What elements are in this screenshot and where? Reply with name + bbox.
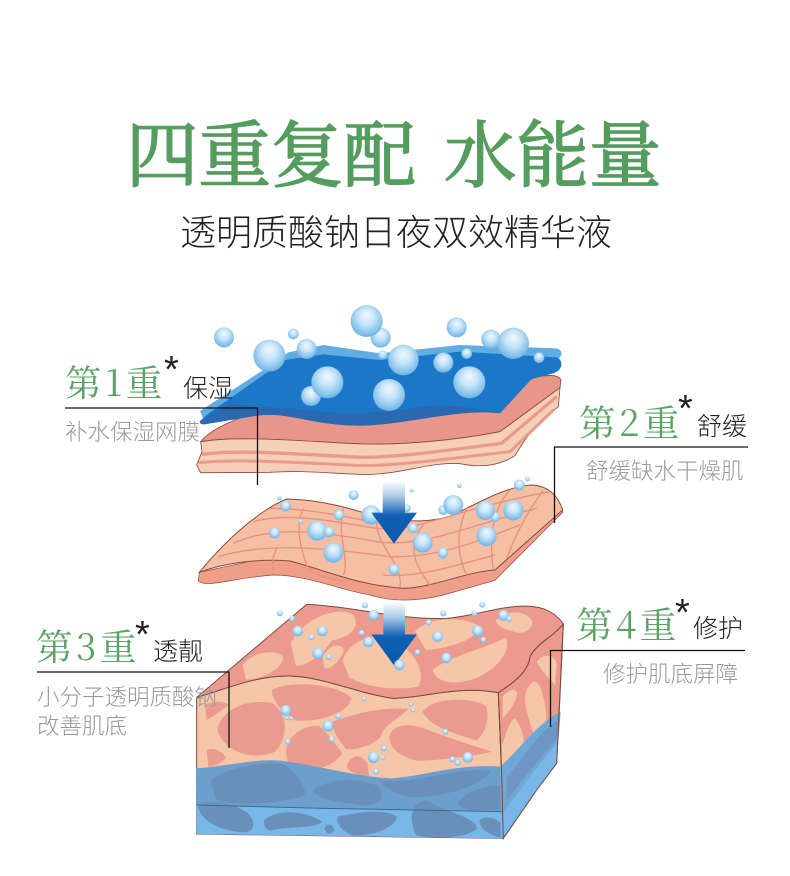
callout: layer 2: 舒缓缺水干燥肌 xyxy=(586,459,744,484)
callout: layer 2: 舒缓 xyxy=(697,413,747,441)
side tissue blobs xyxy=(502,656,557,767)
layer 1: hydrating mask on skin xyxy=(197,305,561,475)
callout: layer 3: 小分子透明质酸钠 xyxy=(37,685,217,710)
layer 1 bubbles xyxy=(214,305,544,411)
skin stripes xyxy=(202,397,557,457)
callout: layer 1: * xyxy=(164,349,179,391)
arrow: down 1 xyxy=(371,481,417,544)
layer 3: skin block xyxy=(196,602,563,838)
callout: layer 3: 透靓 xyxy=(153,638,203,666)
callout: layer 1: 保湿 xyxy=(183,375,233,403)
callout: layer 3: 第3重 xyxy=(36,619,140,671)
callout: layer 4: 第4重 xyxy=(576,597,680,649)
callout: layer 1: 补水保湿网膜 xyxy=(65,420,200,445)
pink skin top face xyxy=(201,376,561,444)
layer 3 bubbles xyxy=(277,602,512,775)
title xyxy=(126,98,662,202)
callout: layer 3: * xyxy=(135,614,150,656)
block top face xyxy=(197,604,563,698)
subtitle: 透明质酸钠日夜双效精华液 xyxy=(180,212,612,253)
block front face xyxy=(197,676,503,838)
block blue side xyxy=(500,712,561,838)
mask front shade xyxy=(200,403,500,426)
layer 2: dry skin sheet xyxy=(198,477,563,600)
top tissue blobs xyxy=(243,612,532,688)
callout: layer 2 xyxy=(554,388,748,523)
sheet underside xyxy=(198,508,563,600)
callout: layer 4 xyxy=(550,592,745,727)
peach skin side xyxy=(197,388,560,475)
callout: layer 3 xyxy=(36,614,229,748)
front tissue blobs xyxy=(205,684,492,776)
callout: layer 1: 第1重 xyxy=(65,355,166,407)
blue blobs xyxy=(198,763,501,838)
callout: layer 2: 第2重 xyxy=(579,395,683,447)
layer 2 bubbles xyxy=(269,477,530,575)
arrow: down 2 xyxy=(371,602,417,665)
callout: layer 4: 修护肌底屏障 xyxy=(603,662,738,687)
dark blue mask xyxy=(200,352,561,426)
callout: layer 4: * xyxy=(675,592,690,634)
callout: layer 4: 修护 xyxy=(693,615,743,643)
callout: layer 3: 改善肌底 xyxy=(37,714,127,739)
sheet top xyxy=(199,485,563,588)
block blue front lower xyxy=(196,760,503,838)
light blue back layer xyxy=(200,345,561,419)
callout: layer 2: * xyxy=(678,388,693,430)
title: 四重复配 xyxy=(126,98,416,202)
title: 水能量 xyxy=(444,98,662,202)
skin grid xyxy=(218,490,550,588)
callout: layer 1 xyxy=(65,349,258,485)
block side face xyxy=(498,624,563,838)
